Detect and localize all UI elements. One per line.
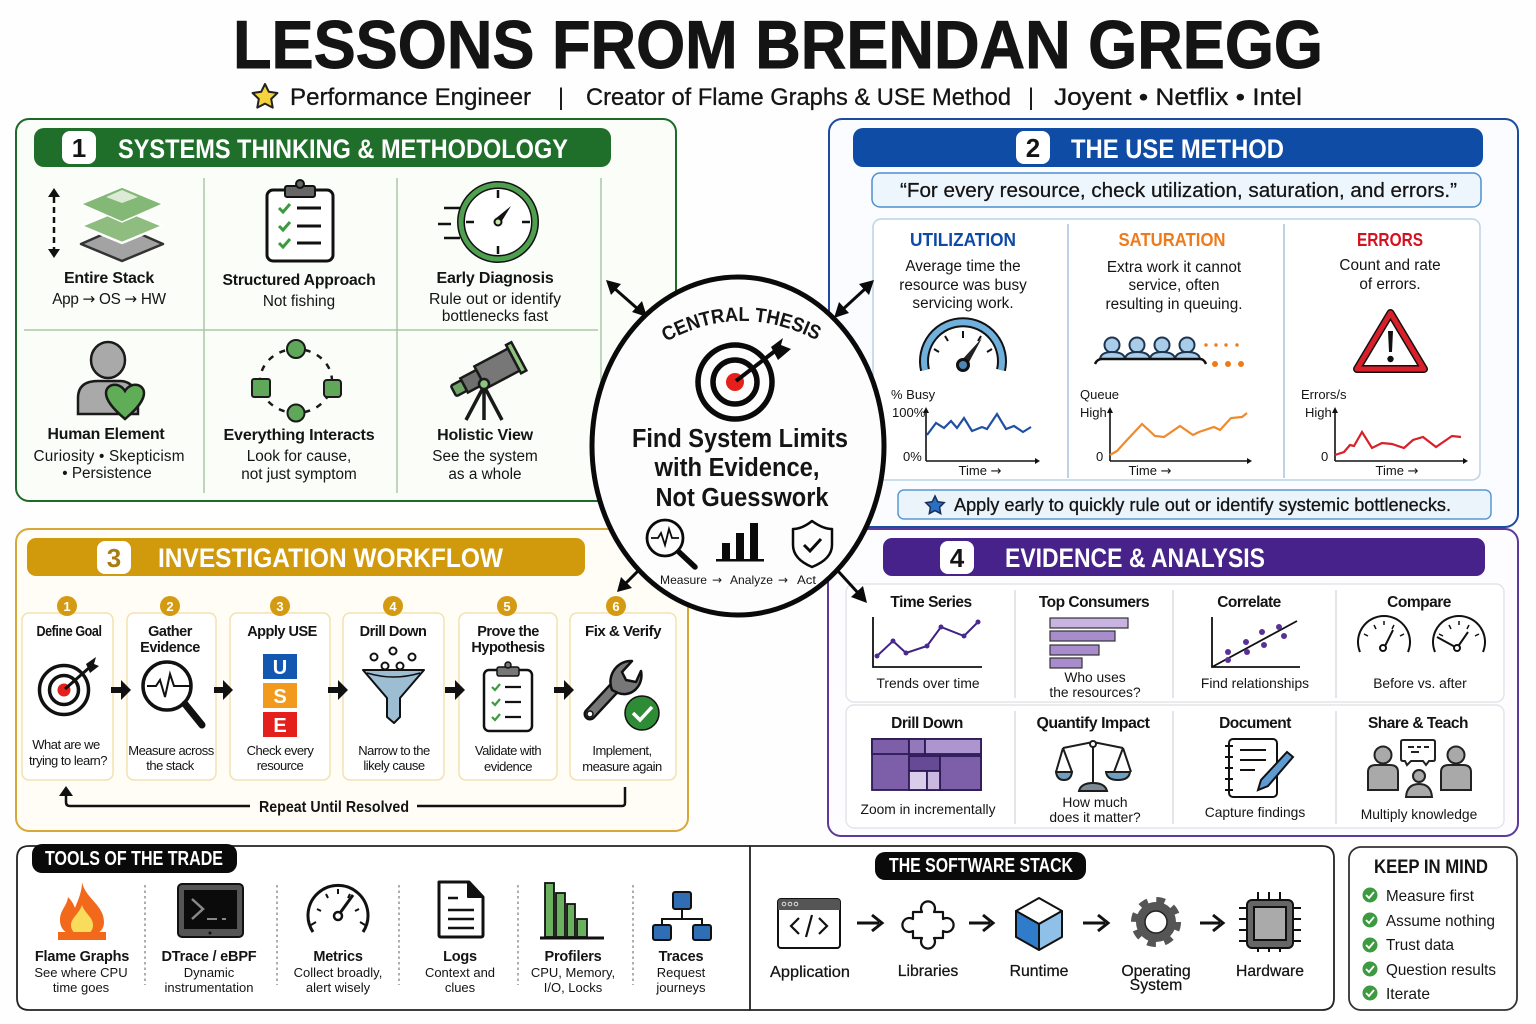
step 1: define goal: trying to learn?	[29, 753, 107, 768]
cell: drill down	[861, 715, 996, 817]
cell: document	[1205, 715, 1305, 820]
layer: operating system	[1121, 900, 1191, 994]
item: iterate: Iterate	[1386, 986, 1430, 1003]
arrow	[1200, 915, 1223, 931]
icon: warning triangle	[1357, 313, 1424, 369]
cell: correlate: Find relationships	[1201, 676, 1309, 691]
step 1: define goal: What are we	[32, 737, 100, 752]
tool: flame graphs: See where CPU	[34, 965, 128, 980]
icon: chip	[1239, 892, 1301, 952]
tool: dtrace ebpf	[162, 884, 257, 995]
panel 3 header	[27, 538, 585, 576]
cell: entire stack	[48, 187, 167, 308]
tool: logs: Logs	[443, 949, 477, 965]
item: question results: Question results	[1386, 962, 1496, 979]
thesis statement: Find System Limits	[632, 425, 848, 453]
column: utilization	[891, 230, 1040, 479]
chart: errors per second: High	[1305, 405, 1332, 420]
label: the software stack	[875, 852, 1086, 880]
tool: traces	[653, 892, 711, 995]
chart: errors per second: Errors/s	[1301, 387, 1347, 402]
tool: traces: Request	[657, 965, 706, 980]
column: errors	[1301, 230, 1468, 479]
chart: percent busy: % Busy	[891, 387, 936, 402]
icon: balance scale	[1056, 741, 1131, 791]
icon: code window	[778, 899, 840, 948]
icon: magnifier with pulse	[143, 662, 202, 725]
description: saturation	[1106, 259, 1242, 313]
step 2: gather evidence: Gather	[148, 624, 193, 640]
thesis statement: Not Guesswork	[656, 484, 829, 512]
icon: measure magnifier	[647, 520, 695, 567]
measure analyze act labels: →	[712, 573, 722, 587]
tool: dtrace ebpf: instrumentation	[165, 980, 253, 995]
item: iterate	[1362, 986, 1430, 1003]
step 2: gather evidence	[127, 596, 216, 780]
icon: queue of people	[1095, 338, 1244, 367]
step 6: fix and verify: Implement,	[592, 743, 652, 758]
tool: profilers: I/O, Locks	[544, 980, 603, 995]
icon: person with heart	[78, 342, 144, 419]
icon: U S E blocks: E	[273, 715, 287, 737]
step 6: fix and verify: Fix & Verify	[585, 624, 661, 640]
tool: profilers	[531, 883, 615, 995]
icon: funnel	[363, 648, 424, 723]
description: utilization: servicing work.	[912, 295, 1014, 312]
step 3: apply USE	[230, 596, 330, 780]
icon: telescope	[446, 342, 526, 420]
cell: compare: Compare	[1387, 594, 1452, 611]
icon: terminal	[178, 884, 243, 937]
panel 1: systems thinking	[16, 119, 676, 501]
icon: tree diagram	[653, 892, 711, 940]
step 3: apply USE: Apply USE	[247, 624, 318, 640]
step 2: gather evidence: Measure across	[128, 743, 215, 758]
workflow arrows	[111, 680, 574, 700]
tool: traces: Traces	[659, 949, 704, 965]
icon: clipboard	[267, 180, 333, 261]
heading: saturation: SATURATION	[1118, 230, 1226, 250]
measure analyze act labels: Analyze	[730, 573, 773, 587]
cell: compare: Before vs. after	[1373, 676, 1467, 691]
loop: repeat until resolved	[59, 786, 625, 816]
step 4: drill down: Narrow to the	[358, 743, 430, 758]
caption: everything interacts	[241, 448, 357, 483]
caption: structured approach: Not fishing	[263, 293, 335, 310]
label: early diagnosis: Early Diagnosis	[436, 270, 554, 287]
arrow	[857, 915, 882, 931]
subtitle: separator: |	[558, 84, 564, 111]
description: saturation: Extra work it cannot	[1107, 259, 1242, 276]
measure analyze act labels	[660, 573, 817, 587]
thesis statement	[632, 425, 848, 512]
subtitle: role: Performance Engineer	[290, 84, 531, 111]
layer: operating system: Operating	[1121, 963, 1191, 980]
quote: “For every resource, check utilization, saturation, and errors.”	[900, 180, 1457, 202]
icon: U S E blocks: U	[273, 657, 287, 679]
description: utilization	[899, 258, 1027, 312]
icon: layered stack	[48, 187, 163, 261]
step 3: apply USE: resource	[257, 758, 304, 773]
label: the software stack: THE SOFTWARE STACK	[889, 855, 1073, 877]
cell: compare	[1358, 594, 1485, 691]
tool: logs: clues	[445, 980, 476, 995]
cell: quantify impact: does it matter?	[1049, 810, 1141, 825]
tool: flame graphs: time goes	[53, 980, 110, 995]
description: utilization: Average time the	[905, 258, 1021, 275]
cell: quantify impact: Quantify Impact	[1036, 715, 1150, 732]
panel 2 header: 2	[1026, 133, 1040, 163]
column: saturation	[1080, 230, 1252, 479]
cell: quantify impact	[1036, 715, 1150, 825]
step 6: fix and verify: 6	[612, 599, 620, 614]
tool: flame graphs	[34, 882, 129, 995]
callout: apply early: Apply early to quickly rule out or identify systemic bottlenecks.	[954, 495, 1451, 515]
chart: treemap	[872, 739, 981, 790]
title: LESSONS FROM BRENDAN GREGG	[233, 7, 1323, 83]
icon: puzzle piece	[902, 901, 954, 949]
tool: logs	[425, 882, 495, 995]
label: human element: Human Element	[48, 426, 165, 443]
cell: drill down: Drill Down	[891, 715, 963, 732]
step 2: gather evidence: 2	[166, 599, 174, 614]
tool: dtrace ebpf: DTrace / eBPF	[162, 949, 257, 965]
arrow: thesis to panel 3	[617, 571, 638, 592]
step 4: drill down: likely cause	[363, 758, 425, 773]
step 1: define goal	[22, 596, 113, 780]
measure analyze act labels: Act	[797, 573, 817, 587]
tool: profilers: Profilers	[544, 949, 602, 965]
step 1: define goal: Define Goal	[36, 624, 102, 640]
icon: people and speech bubble	[1368, 740, 1471, 797]
icon: clipboard checklist	[484, 662, 532, 731]
heading: central thesis: CENTRAL THESIS	[662, 307, 821, 340]
panel 1 header	[34, 128, 611, 167]
caption: early diagnosis: bottlenecks fast	[442, 308, 549, 325]
subtitle: employers: Joyent • Netflix • Intel	[1054, 84, 1302, 111]
chart: ranked bars	[1050, 618, 1128, 668]
layer: application: Application	[770, 964, 850, 981]
quote	[872, 173, 1481, 207]
step 5: prove hypothesis	[459, 596, 557, 780]
layer: libraries: Libraries	[898, 963, 958, 980]
icon: target	[40, 657, 99, 714]
subtitle	[253, 84, 1302, 111]
panel 2 header: THE USE METHOD	[1071, 134, 1284, 164]
cell: early diagnosis	[429, 185, 561, 325]
icon: two gauges	[1358, 616, 1485, 652]
step 4: drill down: Drill Down	[360, 624, 426, 640]
cell: share and teach	[1361, 715, 1478, 822]
caption: human element: • Persistence	[62, 465, 152, 482]
label: entire stack: Entire Stack	[64, 270, 154, 287]
item: trust data: Trust data	[1386, 937, 1454, 954]
caption: early diagnosis	[429, 291, 561, 325]
icon: cube	[1016, 898, 1062, 950]
panel 1 header: 1	[72, 133, 86, 163]
description: errors	[1339, 257, 1441, 293]
panel 4 header: EVIDENCE & ANALYSIS	[1005, 543, 1265, 573]
icon: connected nodes	[252, 340, 341, 422]
icon: analyze bars	[716, 523, 764, 562]
thesis statement: with Evidence,	[654, 454, 820, 482]
icon: wrench and check	[587, 661, 659, 730]
panel: the software stack	[750, 846, 1334, 1010]
icon: U S E blocks	[263, 654, 297, 737]
cell: share and teach: Share & Teach	[1368, 715, 1468, 732]
cell: top consumers	[1039, 594, 1149, 700]
cell: quantify impact: How much	[1062, 795, 1128, 810]
description: utilization: resource was busy	[899, 277, 1027, 294]
panel 4: evidence and analysis	[828, 529, 1518, 836]
cell: time series: Trends over time	[876, 676, 980, 691]
layer: runtime: Runtime	[1010, 963, 1069, 980]
arrow: thesis to panel 2	[834, 280, 874, 318]
icon: stopwatch	[438, 185, 535, 259]
layer: hardware	[1236, 892, 1304, 980]
cell: human element	[34, 342, 184, 482]
icon: descending bars	[540, 883, 604, 938]
cell: correlate: Correlate	[1217, 594, 1282, 611]
arrow: thesis to panel 1	[606, 280, 647, 317]
arrow	[969, 915, 993, 931]
step 4: drill down: 4	[389, 599, 397, 614]
heading: utilization: UTILIZATION	[910, 230, 1016, 250]
step 5: prove hypothesis: 5	[503, 599, 511, 614]
chart: percent busy: 0%	[903, 449, 922, 464]
panel 4 header	[883, 538, 1485, 576]
cell: everything interacts	[224, 340, 375, 483]
caption: entire stack: App → OS → HW	[52, 290, 167, 308]
item: measure first: Measure first	[1386, 888, 1475, 905]
caption: everything interacts: Look for cause,	[247, 448, 351, 465]
tool: profilers: CPU, Memory,	[531, 965, 615, 980]
step 3: apply USE: 3	[276, 599, 284, 614]
layer: application	[770, 899, 850, 981]
heading: errors: ERRORS	[1357, 230, 1423, 250]
arrow: thesis to panel 4	[838, 571, 867, 603]
caption: human element: Curiosity • Skepticism	[34, 448, 184, 465]
layer: operating system: System	[1130, 977, 1182, 994]
panel 4 header: 4	[950, 543, 965, 573]
chart: line trend	[873, 617, 982, 667]
tool: logs: Context and	[425, 965, 495, 980]
cell: drill down: Zoom in incrementally	[861, 802, 996, 817]
icon: document	[439, 882, 483, 937]
caption: everything interacts: not just symptom	[241, 466, 357, 483]
chart: percent busy: Time →	[959, 463, 1002, 479]
layer: hardware: Hardware	[1236, 963, 1304, 980]
icon: U S E blocks: S	[273, 686, 287, 708]
icon: act shield	[793, 521, 832, 567]
layer: libraries	[898, 901, 958, 980]
caption: human element	[34, 448, 184, 482]
icon: star	[253, 84, 277, 108]
chart: errors per second	[1301, 387, 1468, 479]
icon: flame	[58, 882, 106, 940]
step 4: drill down	[343, 596, 444, 780]
cell: document: Document	[1219, 715, 1291, 732]
panel 1 header: SYSTEMS THINKING & METHODOLOGY	[118, 134, 568, 164]
panel 3 header: INVESTIGATION WORKFLOW	[158, 543, 503, 573]
panel 3: investigation workflow	[16, 529, 688, 831]
step 2: gather evidence: the stack	[146, 758, 195, 773]
central thesis circle	[590, 274, 886, 618]
caption: holistic view: as a whole	[448, 466, 522, 483]
tool: metrics: Metrics	[313, 949, 363, 965]
loop: repeat until resolved: Repeat Until Resolved	[259, 799, 409, 816]
panel: keep in mind	[1349, 847, 1517, 1010]
panel 2 header	[853, 128, 1483, 167]
step 6: fix and verify	[570, 596, 676, 780]
heading: keep in mind: KEEP IN MIND	[1374, 857, 1488, 878]
caption: holistic view: See the system	[432, 448, 538, 465]
icon: notebook and pencil	[1225, 739, 1293, 797]
panel 3 header: 3	[107, 543, 121, 573]
description: errors: of errors.	[1359, 276, 1421, 293]
tool: dtrace ebpf: Dynamic	[184, 965, 235, 980]
measure analyze act labels: →	[778, 573, 788, 587]
step 5: prove hypothesis: Prove the	[477, 624, 539, 640]
step 5: prove hypothesis: Validate with	[475, 743, 541, 758]
panel: tools of the trade	[17, 844, 750, 1010]
chart: queue: 0	[1096, 449, 1103, 464]
step 3: apply USE: Check every	[247, 743, 314, 758]
chart: percent busy: 100%	[892, 405, 926, 420]
icon: gauge	[924, 322, 1002, 370]
measure analyze act labels: Measure	[660, 573, 707, 587]
step 5: prove hypothesis: evidence	[484, 759, 532, 774]
cell: structured approach	[222, 180, 376, 310]
cell: time series	[873, 594, 982, 691]
chart: queue: Time →	[1129, 463, 1172, 479]
cell: share and teach: Multiply knowledge	[1361, 807, 1478, 822]
icon: gauge	[308, 885, 368, 932]
step 6: fix and verify: measure again	[582, 759, 662, 774]
chart: queue: High	[1080, 405, 1107, 420]
tool: metrics: Collect broadly,	[294, 965, 382, 980]
callout: apply early	[898, 490, 1491, 519]
step 5: prove hypothesis: Hypothesis	[471, 640, 545, 656]
subtitle: separator: |	[1028, 84, 1034, 111]
arrow	[1083, 915, 1108, 931]
label: everything interacts: Everything Interacts	[224, 427, 375, 444]
cell: top consumers: Top Consumers	[1039, 594, 1149, 611]
tool: metrics	[294, 885, 382, 995]
chart: percent busy	[891, 387, 1040, 479]
panel 2: the USE method	[829, 119, 1518, 527]
description: saturation: service, often	[1129, 277, 1219, 294]
chart: errors per second: Time →	[1376, 463, 1419, 479]
cell: top consumers: Who uses	[1064, 670, 1126, 685]
step 2: gather evidence: Evidence	[140, 640, 200, 656]
cell: top consumers: the resources?	[1049, 685, 1141, 700]
caption: holistic view	[432, 448, 538, 483]
label: tools of the trade: TOOLS OF THE TRADE	[45, 848, 223, 870]
chart: queue: Queue	[1080, 387, 1119, 402]
layer: runtime	[1010, 898, 1069, 980]
subtitle: creator: Creator of Flame Graphs & USE Method	[586, 84, 1011, 111]
description: errors: Count and rate	[1339, 257, 1441, 274]
caption: early diagnosis: Rule out or identify	[429, 291, 561, 308]
icon: gear	[1134, 900, 1178, 944]
step 1: define goal: 1	[63, 599, 71, 614]
chart: errors per second: 0	[1321, 449, 1328, 464]
icon: target with arrow	[698, 338, 791, 419]
chart: scatter	[1212, 617, 1300, 667]
item: assume nothing: Assume nothing	[1386, 913, 1495, 930]
label: holistic view: Holistic View	[437, 427, 534, 444]
cell: document: Capture findings	[1205, 805, 1305, 820]
cell: time series: Time Series	[890, 594, 972, 611]
description: saturation: resulting in queuing.	[1106, 296, 1242, 313]
tool: traces: journeys	[655, 980, 706, 995]
label: tools of the trade	[32, 844, 237, 873]
chart: queue	[1080, 387, 1252, 479]
cell: correlate	[1201, 594, 1309, 691]
cell: holistic view	[432, 342, 538, 483]
tool: flame graphs: Flame Graphs	[35, 949, 129, 965]
tool: metrics: alert wisely	[306, 980, 371, 995]
label: structured approach: Structured Approach	[222, 272, 376, 289]
